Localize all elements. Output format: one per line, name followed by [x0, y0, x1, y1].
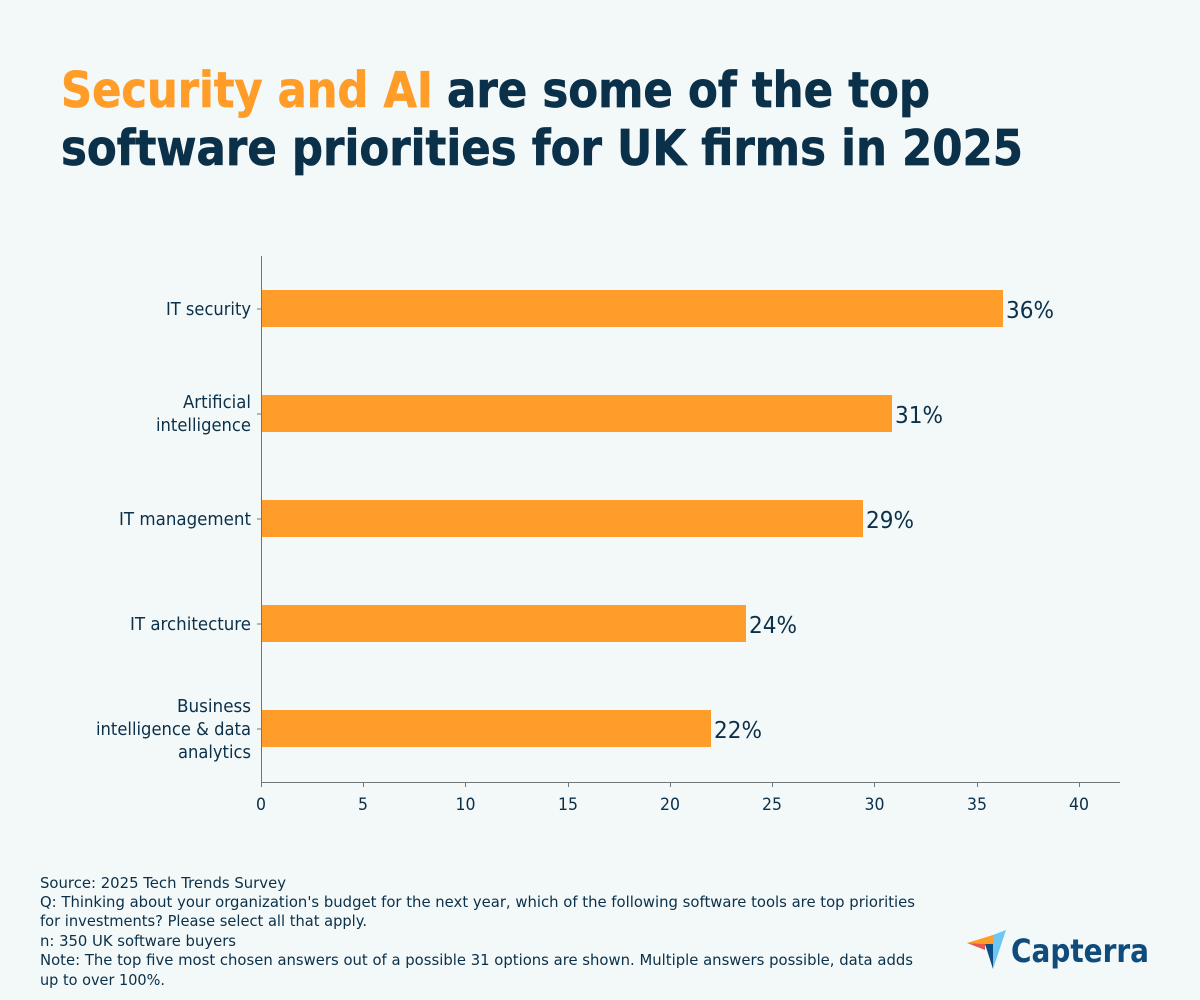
title: are some of the top	[447, 62, 930, 119]
category labels: Artificial	[183, 393, 251, 413]
category labels: intelligence & data	[96, 720, 251, 740]
title: Security and AI	[61, 62, 433, 119]
axes and ticks	[257, 256, 1120, 787]
x axis labels: 10	[456, 795, 476, 815]
category labels: IT security	[166, 300, 251, 320]
category labels	[96, 300, 251, 763]
x axis labels: 40	[1069, 795, 1089, 815]
category labels: intelligence	[156, 416, 251, 436]
category labels: IT architecture	[130, 615, 251, 635]
icon: Capterra arrow	[967, 930, 1006, 969]
category labels: Business	[177, 697, 251, 717]
source and notes: up to over 100%.	[40, 971, 165, 989]
source and notes	[40, 874, 915, 989]
logo: Capterra: Capterra	[1011, 932, 1149, 970]
title	[61, 62, 1023, 177]
x axis labels: 5	[358, 795, 368, 815]
x axis labels: 20	[660, 795, 680, 815]
source and notes: for investments? Please select all that apply.	[40, 912, 367, 930]
x axis labels: 30	[864, 795, 884, 815]
value labels: 24%	[749, 613, 797, 639]
value labels: 29%	[866, 508, 914, 534]
source and notes: Q: Thinking about your organization's budget for the next year, which of the following software tools are top priorities	[40, 893, 915, 911]
value labels	[714, 298, 1054, 744]
bar chart	[96, 256, 1120, 815]
x axis labels: 15	[558, 795, 578, 815]
x axis labels	[256, 795, 1089, 815]
source and notes: n: 350 UK software buyers	[40, 932, 236, 950]
value labels: 22%	[714, 718, 762, 744]
source and notes: Source: 2025 Tech Trends Survey	[40, 874, 286, 892]
title: software priorities for UK firms in 2025	[61, 120, 1023, 177]
bars	[261, 290, 1003, 747]
x axis labels: 25	[762, 795, 782, 815]
category labels: analytics	[178, 743, 251, 763]
value labels: 36%	[1006, 298, 1054, 324]
x axis labels: 35	[967, 795, 987, 815]
logo: Capterra	[967, 930, 1149, 970]
category labels: IT management	[119, 510, 251, 530]
value labels: 31%	[895, 403, 943, 429]
x axis labels: 0	[256, 795, 266, 815]
source and notes: Note: The top five most chosen answers out of a possible 31 options are shown. Multiple answers possible, data adds	[40, 951, 913, 969]
